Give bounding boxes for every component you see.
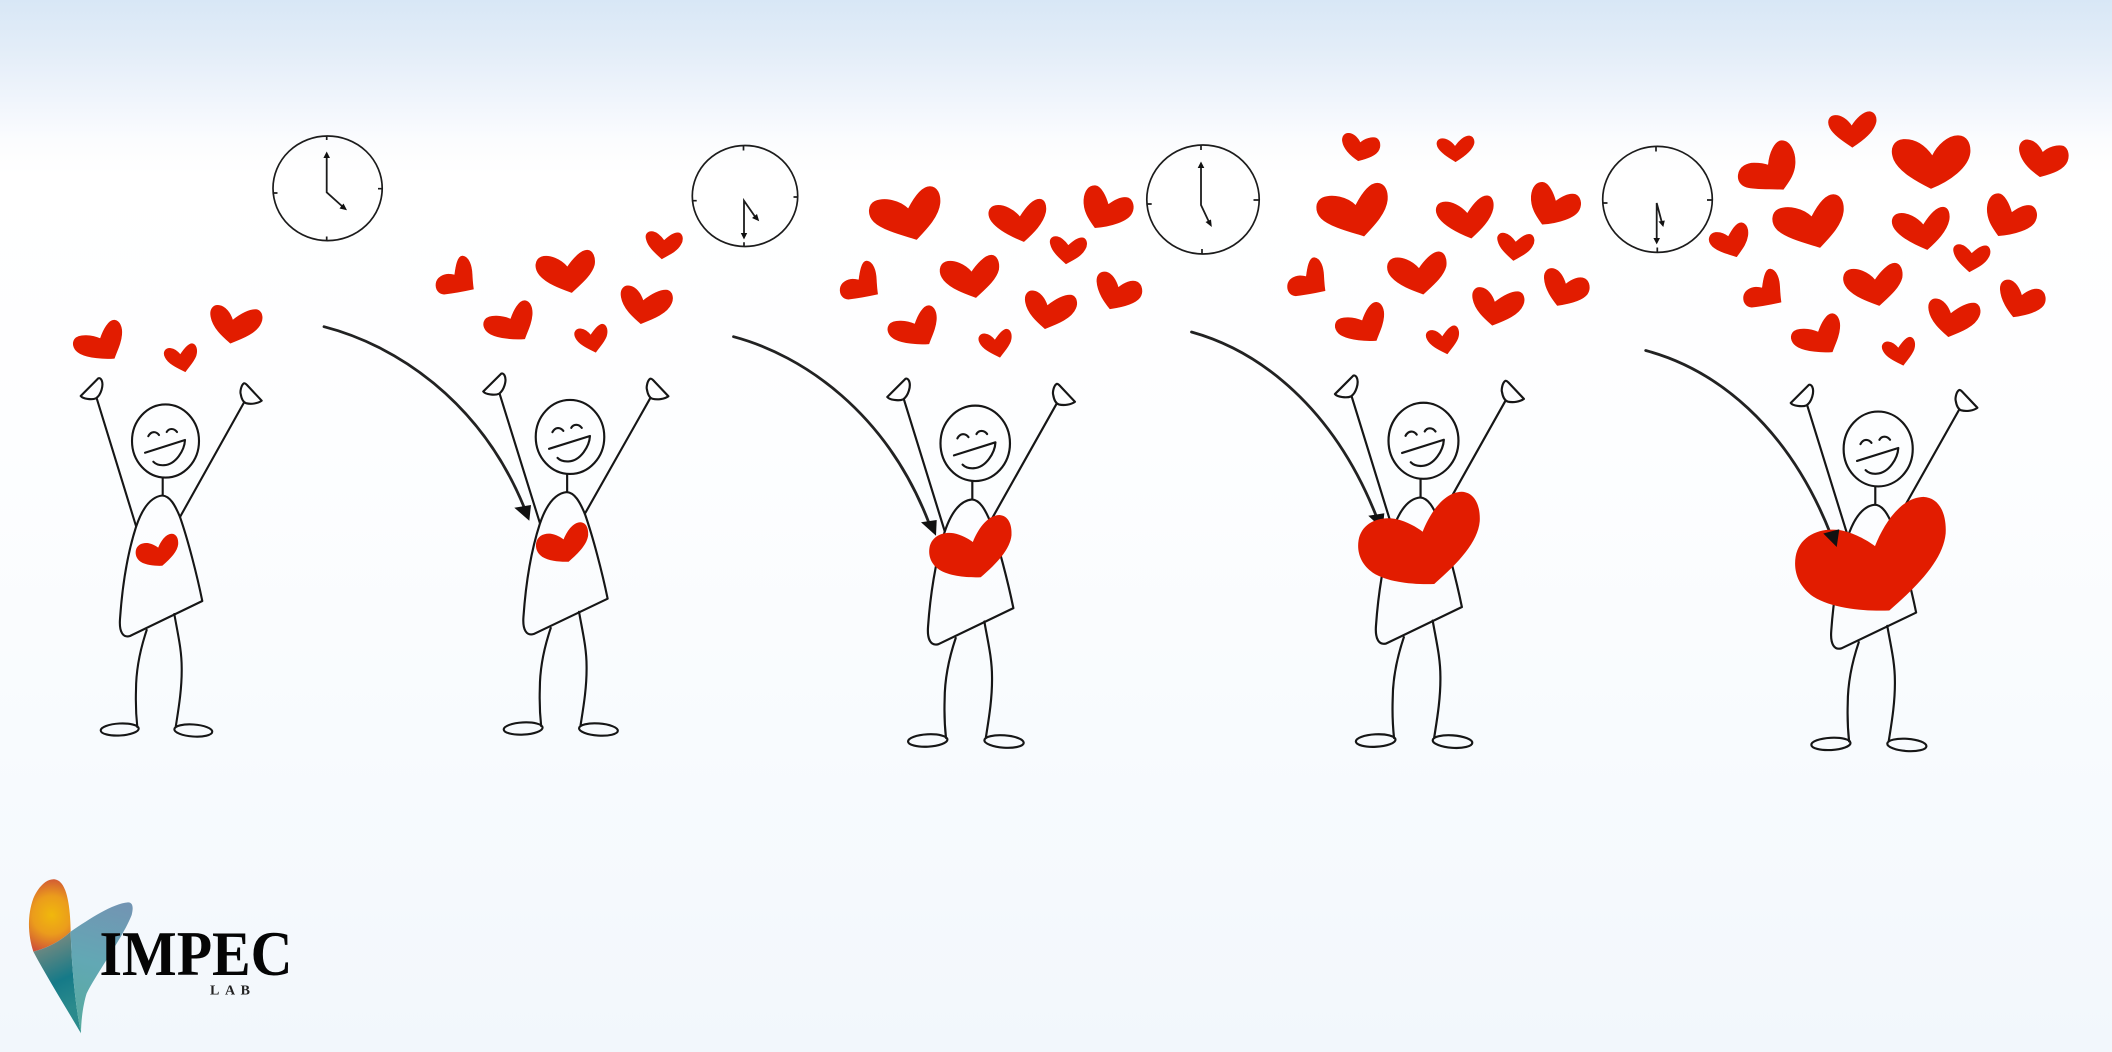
hearts floating above person 4: [1288, 133, 1589, 354]
hearts floating above person 2: [436, 232, 682, 352]
stick figure 1: [81, 378, 262, 738]
step 3: clock, arrow, person with more hearts: [692, 146, 1142, 749]
heart on chest 3: [929, 515, 1012, 577]
top right small heart: [1437, 136, 1474, 162]
logo wordmark: IMPEC: [100, 918, 292, 989]
step 1: one person with few hearts: [73, 305, 262, 738]
stick figure 5: [1791, 385, 1977, 752]
step 2: clock, arrow, person with more hearts: [273, 136, 682, 737]
main heart group: [1288, 182, 1589, 354]
logo: IMPEC LAB: [29, 879, 293, 1033]
hearts floating above person 5: [1709, 112, 2068, 365]
clock 4: [1603, 146, 1712, 252]
step 4: clock, arrow, person with more hearts: [1147, 133, 1589, 749]
logo heart mark: [29, 879, 133, 1033]
curved arrow 3: [1192, 332, 1384, 529]
heart on chest 1: [136, 534, 178, 566]
hearts floating above person 1: [73, 305, 262, 372]
arrow head 4: [1823, 529, 1839, 547]
clock 2: [692, 146, 798, 247]
step 5: clock, arrow, person with most hearts: [1603, 112, 2068, 752]
heart on chest 2: [536, 522, 588, 562]
top left small heart: [1342, 133, 1380, 161]
heart on chest 5: [1795, 497, 1946, 611]
stick figure 2: [483, 373, 668, 737]
curved arrow 2: [734, 337, 937, 536]
logo subtitle: LAB: [210, 983, 250, 998]
curved arrow 1: [324, 327, 531, 521]
curved arrow 4: [1646, 350, 1831, 535]
stick figure 3: [887, 379, 1075, 749]
clock 1: [273, 136, 382, 241]
clock 3: [1147, 145, 1259, 254]
hearts floating above person 3: [840, 186, 1142, 357]
stick figure 4: [1335, 376, 1524, 749]
heart on chest 4: [1358, 492, 1480, 584]
